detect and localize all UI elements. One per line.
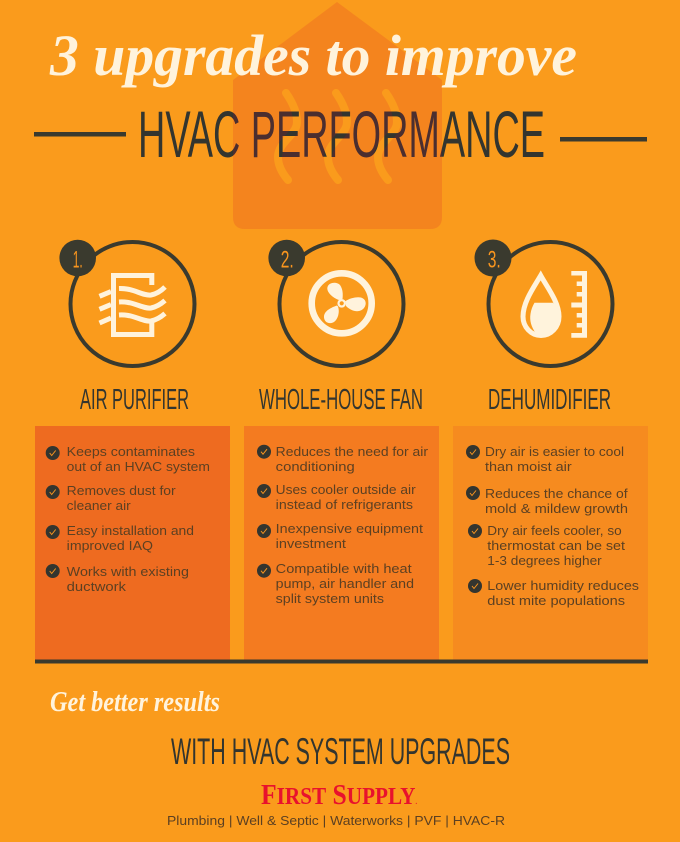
- benefit text: Uses cooler outside air: [276, 483, 416, 497]
- benefit text: than moist air: [485, 460, 572, 474]
- benefit text: [485, 445, 639, 608]
- tagline: Get better results: Get better results: [50, 687, 220, 718]
- benefit text: Reduces the need for air: [276, 445, 428, 459]
- benefit text: thermostat can be set: [487, 539, 626, 553]
- icon: fan: [312, 273, 372, 333]
- base rule under panels: [35, 660, 648, 664]
- panel: air purifier benefits: [35, 426, 230, 660]
- benefit text: Dry air is easier to cool: [485, 445, 624, 459]
- benefit text: Compatible with heat: [276, 562, 412, 576]
- badge 3: 3.: [488, 246, 501, 273]
- benefit text: pump, air handler and: [276, 577, 414, 591]
- check marks: [50, 449, 478, 588]
- benefit text: 1-3 degrees higher: [487, 554, 602, 568]
- benefit text: instead of refrigerants: [276, 498, 413, 512]
- logo: First Supply: FIRST SUPPLY.: [261, 779, 417, 811]
- benefit text: split system units: [276, 592, 384, 606]
- benefit text: Removes dust for: [67, 484, 176, 498]
- benefit text: Easy installation and: [67, 524, 194, 538]
- benefit text: Keeps contaminates: [67, 445, 195, 459]
- benefit text: Inexpensive equipment: [276, 522, 424, 536]
- check icons: [46, 446, 60, 578]
- footer: product categories: Plumbing | Well & Septic | Waterworks | PVF | HVAC-R: [167, 814, 505, 828]
- benefit text: ductwork: [67, 580, 127, 594]
- benefit text: Lower humidity reduces: [487, 579, 639, 593]
- check icons: [257, 445, 271, 578]
- benefit text: Dry air feels cooler, so: [487, 524, 622, 538]
- benefit text: Reduces the chance of: [485, 487, 628, 501]
- title: 3 upgrades to improve: 3 upgrades to improve: [49, 23, 577, 88]
- benefit text: cleaner air: [67, 499, 131, 513]
- panel: dehumidifier benefits: [453, 426, 648, 660]
- icon: filter with air waves: [100, 276, 165, 334]
- benefit text: conditioning: [276, 460, 355, 474]
- house background icon with heat waves: [233, 2, 442, 229]
- icon: water drop: [523, 276, 559, 336]
- benefit text: [67, 445, 210, 594]
- badge 2: 2.: [281, 246, 294, 273]
- benefit text: Works with existing: [67, 565, 189, 579]
- benefit text: mold & mildew growth: [485, 502, 628, 516]
- column 2 icon: whole-house fan: [268, 240, 404, 366]
- column 3 icon: dehumidifier: [474, 240, 612, 366]
- benefit text: investment: [276, 537, 347, 551]
- benefit text: improved IAQ: [67, 539, 153, 553]
- panel: whole-house fan benefits: [244, 426, 439, 660]
- icon: humidity gauge: [571, 271, 587, 338]
- check icons: [466, 445, 482, 593]
- benefit text: [276, 445, 428, 606]
- column 1 icon: air purifier: [59, 240, 195, 366]
- label: AIR PURIFIER: AIR PURIFIER: [80, 384, 189, 416]
- benefit text: out of an HVAC system: [67, 460, 210, 474]
- benefit text: dust mite populations: [487, 594, 625, 608]
- badge 1: 1.: [73, 246, 83, 273]
- label: WHOLE-HOUSE FAN: WHOLE-HOUSE FAN: [259, 384, 423, 416]
